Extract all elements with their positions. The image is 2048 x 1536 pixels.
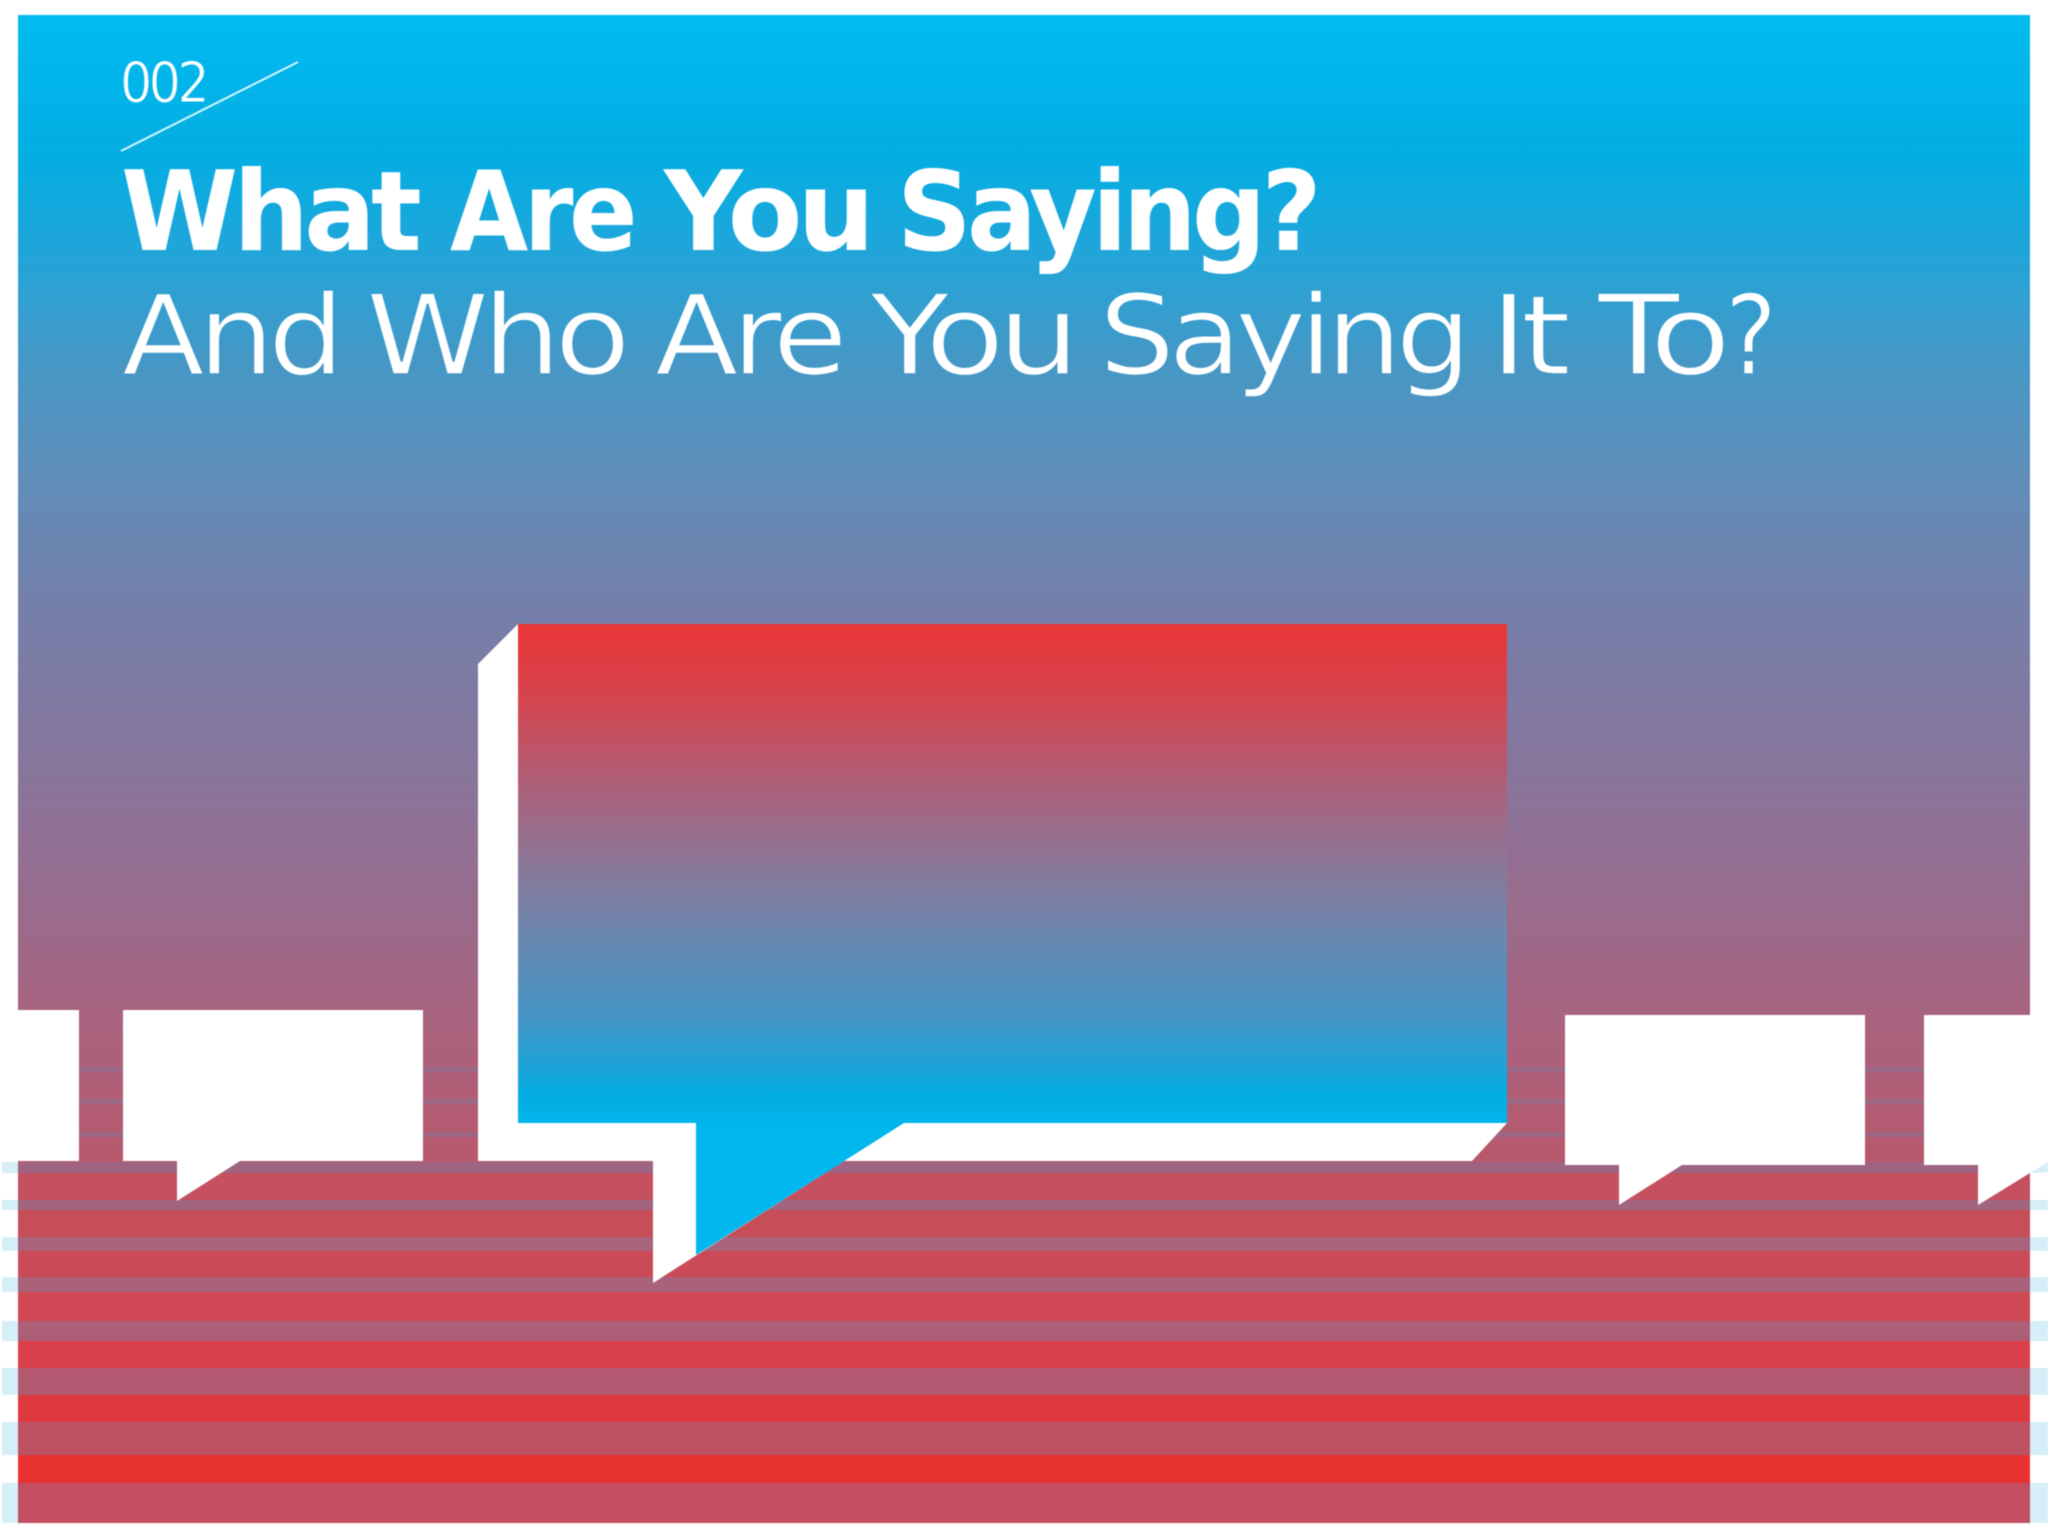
- subtitle: You: [869, 272, 1073, 401]
- white extruded shadow of bubble: [478, 624, 1507, 1283]
- icon: white speech bubble, right: [1565, 1015, 1865, 1205]
- red to blue gradient bubble face: [518, 624, 1507, 1255]
- thin stripes behind the speech bubbles: [18, 1067, 2030, 1137]
- title: You: [662, 148, 870, 277]
- issue number with diagonal rule: [120, 51, 298, 151]
- icon: white speech bubble, left: [123, 1010, 423, 1201]
- striped red floor: [18, 1162, 2030, 1523]
- subtitle: And: [122, 272, 338, 401]
- title: What: [121, 148, 420, 277]
- icon: large central speech bubble: [478, 624, 1507, 1283]
- issue number with diagonal rule: 002: [120, 51, 206, 116]
- subtitle: To: [1597, 272, 1724, 401]
- title: Saying?: [897, 148, 1317, 277]
- title: [121, 148, 1317, 277]
- title: Are: [450, 148, 633, 277]
- icon: cropped white speech bubble, far right: [1924, 1015, 2048, 1205]
- subtitle: ?: [1725, 272, 1777, 401]
- subtitle: [122, 272, 1777, 401]
- subtitle: It: [1490, 272, 1568, 401]
- subtitle: Are: [655, 272, 842, 401]
- subtitle: Saying: [1099, 272, 1465, 401]
- subtitle: Who: [366, 272, 624, 401]
- pale blue margin stripes: [2, 1162, 2048, 1523]
- panel: gradient background: [18, 15, 2030, 1165]
- icon: cropped white speech bubble, far left: [18, 1010, 79, 1161]
